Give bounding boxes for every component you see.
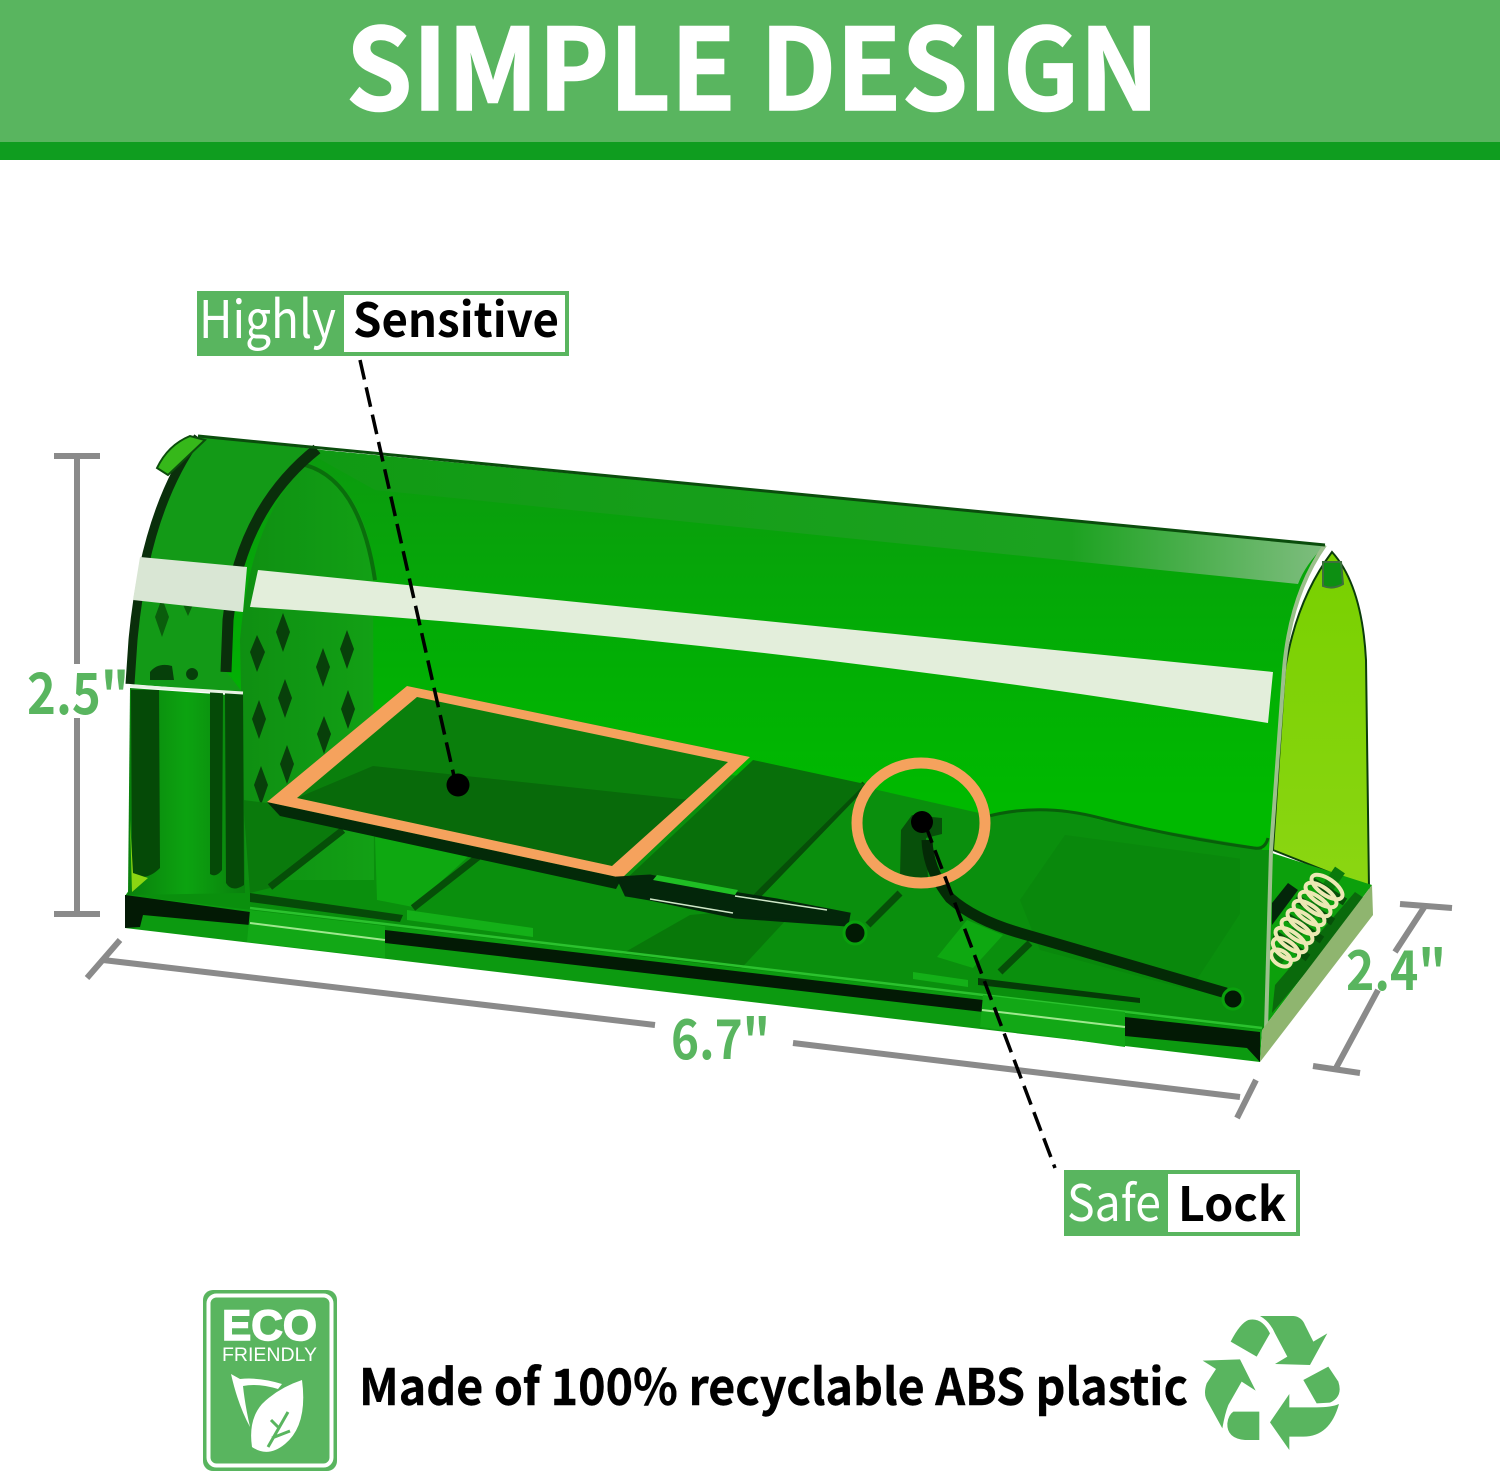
- width dimension line: [1313, 904, 1452, 1073]
- top edge line: [198, 436, 1325, 545]
- length value: 6.7": [671, 995, 770, 1075]
- leaf: [251, 1380, 303, 1452]
- dark floor rail: [978, 978, 1140, 1003]
- icon: eco friendly badge: [203, 1290, 337, 1471]
- base right dark rail: [1272, 892, 1367, 1013]
- door lower dark stripes: [131, 690, 244, 889]
- door lock holes: [150, 665, 198, 680]
- spring: [1268, 870, 1346, 970]
- base side edge: [1260, 885, 1373, 1062]
- outer rim highlight: [1266, 545, 1325, 1030]
- base clip highlights: [250, 923, 1125, 1027]
- base right top surface: [1262, 853, 1372, 1030]
- door lower panel: [128, 688, 245, 895]
- base black channels: [125, 895, 1260, 1062]
- end wall dark rim: [305, 465, 375, 580]
- paddle shadow: [267, 802, 622, 889]
- footer text: Made of 100% recyclable ABS plastic: [359, 1348, 1188, 1420]
- safe lock orange ring: [857, 763, 985, 883]
- lower right ball repeat: [1223, 989, 1243, 1009]
- trigger tab: [653, 875, 738, 895]
- lime corner: [130, 820, 148, 892]
- top lighter strip: [300, 448, 1325, 584]
- right floor shade: [1020, 835, 1262, 990]
- middle floor shade: [620, 905, 800, 975]
- height dimension line: [54, 456, 100, 914]
- base clips: [247, 910, 1125, 1047]
- base light ledge: [407, 910, 968, 987]
- spring shadow coils: [1275, 880, 1345, 958]
- icon: eco friendly badge: FRIENDLY: [222, 1345, 317, 1366]
- spring rod: [1275, 870, 1340, 963]
- end wall lower shade: [243, 800, 343, 893]
- door panel: [130, 437, 317, 693]
- label: Highly Sensitive: Sensitive: [353, 282, 559, 351]
- wall cover left of spring: [1240, 850, 1271, 1030]
- leaf swoosh: [231, 1374, 282, 1427]
- lower right ball: [1223, 989, 1243, 1009]
- icon: eco friendly badge: ECO: [222, 1302, 317, 1350]
- trigger highlights: [650, 896, 827, 913]
- leaf vein: [268, 1412, 290, 1447]
- bright floor panel: [375, 837, 470, 907]
- lime far end of tunnel: [1273, 552, 1369, 888]
- lower left ball: [844, 922, 866, 944]
- paddle: [267, 686, 750, 878]
- vent diamonds: [250, 613, 355, 805]
- floor: [125, 745, 1268, 1032]
- wall edge over spring: [1266, 850, 1271, 1030]
- base dark ledge: [250, 893, 403, 922]
- icon: recycling symbol: [1203, 1316, 1340, 1450]
- door diamonds: [155, 582, 195, 637]
- label: Safe Lock: Safe: [1067, 1164, 1161, 1236]
- lock post: [900, 815, 942, 878]
- white light band tunnel: [250, 570, 1273, 723]
- floor diagonal stripes: [270, 784, 1030, 972]
- mouse trap product: [125, 436, 1373, 1062]
- width value: 2.4": [1346, 926, 1446, 1006]
- height value: 2.5": [27, 649, 129, 731]
- base front: [125, 895, 1262, 1062]
- base lip highlight: [250, 908, 1262, 1028]
- bright floor panel two: [937, 920, 1003, 968]
- tunnel wall: [225, 448, 1325, 1030]
- paddle orange frame: [267, 686, 750, 878]
- door arc rims: [130, 437, 198, 684]
- floor panel right of paddle: [625, 760, 865, 895]
- callout leader: lock: [911, 811, 1055, 1168]
- paddle inner shade: [297, 766, 690, 866]
- base right black notch: [1272, 883, 1298, 925]
- far end latch: [1323, 562, 1343, 588]
- label: Safe Lock: Lock: [1178, 1166, 1287, 1235]
- floor curve edge: [985, 810, 1268, 848]
- lock bar: [927, 840, 1226, 993]
- length dimension line: [87, 940, 1256, 1118]
- door seam: [130, 686, 243, 693]
- door tab: [157, 436, 205, 475]
- label: Highly Sensitive: [197, 278, 569, 356]
- end wall with vents: [240, 465, 374, 880]
- white light band door: [133, 557, 247, 612]
- trigger bar: [618, 876, 849, 925]
- header banner: [0, 0, 1500, 160]
- label: Highly Sensitive: Highly: [199, 278, 336, 353]
- callout leader: sensitive: [360, 360, 470, 796]
- label: Safe Lock: [1064, 1164, 1300, 1236]
